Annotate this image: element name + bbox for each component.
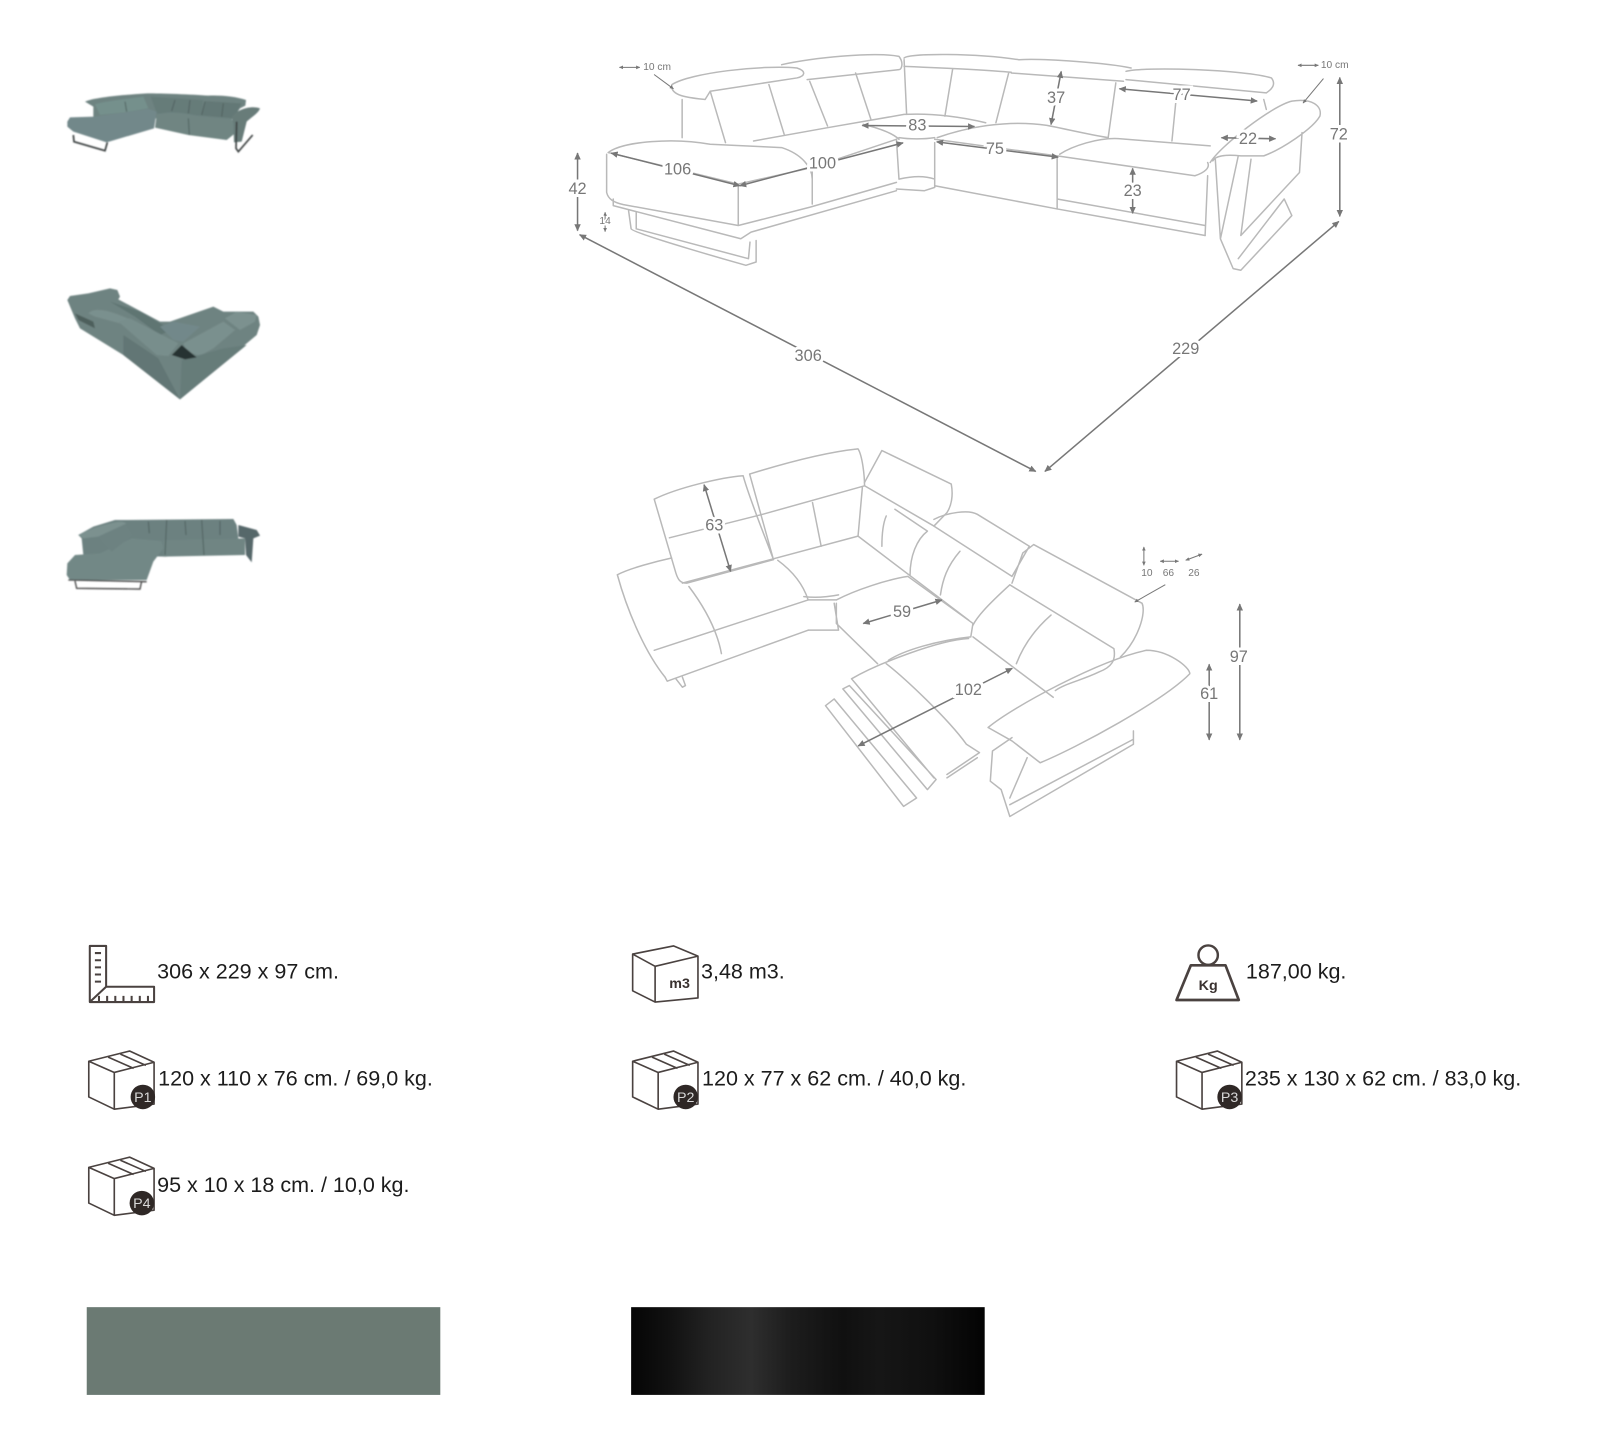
dimension: 61: 61 xyxy=(1200,685,1218,703)
dimension: 61 xyxy=(1200,664,1218,740)
sofa outline xyxy=(617,449,1190,816)
spec: package P3: 235 x 130 x 62 cm. / 83,0 kg. xyxy=(1245,1067,1521,1091)
dimension: 10 cm right xyxy=(1298,60,1349,103)
dimension: 77 xyxy=(1119,86,1257,104)
icon: kettlebell weight xyxy=(1177,945,1239,1000)
spec: overall dimensions: 306 x 229 x 97 cm. xyxy=(157,960,339,984)
line drawing: sofa reclined with dimensions xyxy=(617,449,1248,816)
icon: cube m3 xyxy=(633,946,698,1002)
dimension: 10 cm left: 10 cm xyxy=(643,62,671,73)
icon: box P1 xyxy=(89,1051,155,1109)
dimension: 72: 72 xyxy=(1330,126,1348,144)
dimension: 10 cm right: 10 cm xyxy=(1321,60,1349,71)
icon: box P4: P4 xyxy=(133,1196,151,1212)
dimension: 14 xyxy=(599,212,611,232)
spec: package P2 xyxy=(633,1051,966,1109)
dimension: 72 xyxy=(1330,78,1348,216)
icon: cube m3: m3 xyxy=(669,976,690,992)
spec: package P4: 95 x 10 x 18 cm. / 10,0 kg. xyxy=(157,1173,410,1197)
spec: package P2: 120 x 77 x 62 cm. / 40,0 kg. xyxy=(702,1067,966,1091)
dimension: 10 cm left xyxy=(619,62,673,89)
dimension: 37: 37 xyxy=(1047,89,1065,107)
dimension: 106 xyxy=(611,153,740,186)
dimension: 23: 23 xyxy=(1124,182,1142,200)
dimension: 75: 75 xyxy=(986,140,1004,158)
dimension: 97: 97 xyxy=(1230,648,1248,666)
icon: box P3 xyxy=(1177,1051,1242,1109)
swatch: black metal xyxy=(631,1307,985,1395)
dimension: 102 xyxy=(858,668,1012,746)
sofa outline xyxy=(607,55,1320,270)
icon: kettlebell weight: Kg xyxy=(1199,978,1218,994)
dimension: 42: 42 xyxy=(568,180,587,198)
dimension: 100 xyxy=(740,143,903,186)
photo: sofa front view xyxy=(67,93,260,152)
line drawing: sofa upright with dimensions xyxy=(568,55,1349,471)
dimension: 306: 306 xyxy=(795,347,822,365)
dimension: 22 xyxy=(1221,130,1276,148)
dimension: 83 xyxy=(862,117,974,135)
dimension: 42 xyxy=(568,153,587,231)
dimension: 10 66 26 headrest: 10 xyxy=(1141,568,1153,579)
icon: box P3: P3 xyxy=(1221,1090,1238,1106)
spec: overall dimensions xyxy=(90,946,339,1002)
dimension: 59 xyxy=(863,600,942,623)
dimension: 23 xyxy=(1124,168,1142,213)
dimension: 83: 83 xyxy=(908,117,926,135)
dimension: 97 xyxy=(1230,604,1248,740)
spec: weight xyxy=(1177,945,1346,1000)
spec: weight: 187,00 kg. xyxy=(1246,960,1346,984)
spec: package P4 xyxy=(89,1157,410,1215)
dimension: 75 xyxy=(937,140,1058,158)
dimension: 10 66 26 headrest: 66 xyxy=(1163,568,1174,579)
dimension: 22: 22 xyxy=(1239,130,1257,148)
photo: sofa side view xyxy=(67,519,260,589)
dimension: 77: 77 xyxy=(1173,86,1191,104)
dimension: 102: 102 xyxy=(955,681,982,699)
icon: set square xyxy=(90,946,154,1002)
spec: volume: 3,48 m3. xyxy=(701,960,785,984)
photo: sofa rear view xyxy=(67,288,260,399)
spec: volume xyxy=(633,946,785,1002)
dimension: 37 xyxy=(1047,71,1065,124)
dimension: 229: 229 xyxy=(1172,340,1199,358)
icon: box P4 xyxy=(89,1157,154,1215)
spec: package P1: 120 x 110 x 76 cm. / 69,0 kg. xyxy=(158,1067,433,1091)
dimension: 306 xyxy=(580,235,1036,471)
dimension: 229 xyxy=(1045,221,1339,471)
spec: package P3 xyxy=(1177,1051,1521,1109)
dimension: 59: 59 xyxy=(893,603,911,621)
icon: box P1: P1 xyxy=(134,1090,152,1106)
dimension: 10 66 26 headrest xyxy=(1135,547,1202,602)
dimension: 14: 14 xyxy=(599,216,611,227)
swatch: upholstery green-grey xyxy=(87,1307,440,1395)
dimension: 63: 63 xyxy=(705,517,723,535)
dimension: 100: 100 xyxy=(809,154,836,172)
dimension: 106: 106 xyxy=(664,160,691,178)
spec: package P1 xyxy=(89,1051,433,1109)
dimension: 63 xyxy=(704,485,731,571)
icon: box P2 xyxy=(633,1051,698,1109)
dimension: 10 66 26 headrest: 26 xyxy=(1188,568,1200,579)
icon: box P2: P2 xyxy=(677,1090,695,1106)
